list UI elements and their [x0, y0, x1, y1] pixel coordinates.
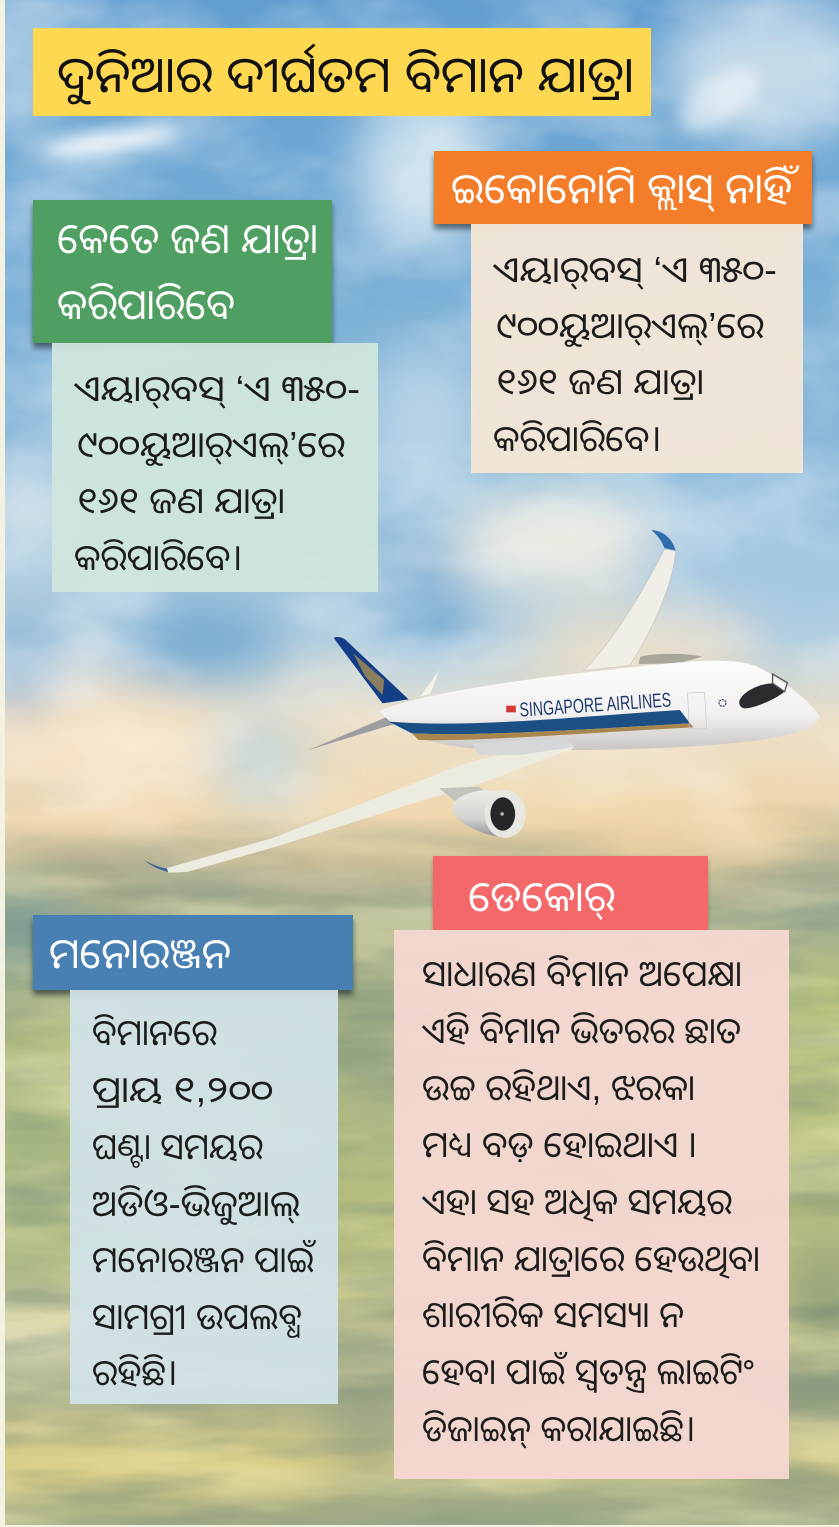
text block: decor details: ଶାରୀରିକ ସମସ୍ୟା ନ: [422, 1294, 684, 1335]
text block: entertainment details: ମନୋରଞ୍ଜନ ପାଇଁ: [92, 1239, 317, 1280]
heading: no economy class: ଇକୋନୋମି କ୍ଲାସ୍ ନାହିଁ: [451, 165, 800, 212]
tailplane: [309, 717, 395, 750]
title banner: ଦୁନିଆର ଦୀର୍ଘତମ ବିମାନ ଯାତ୍ରା: [57, 43, 634, 105]
panel: no economy class: [434, 151, 812, 473]
text block: decor details: ଏହା ସହ ଅଧିକ ସମୟର: [421, 1181, 732, 1222]
livery stripes: [389, 710, 690, 734]
text block: economy details: ୧୬୧ ଜଣ ଯାତ୍ରା: [496, 361, 704, 402]
far wing: [584, 549, 676, 671]
text block: decor details: ଏହି ବିମାନ ଭିତରର ଛାତ: [421, 1010, 741, 1051]
text block: entertainment details: ଅଡିଓ-ଭିଜୁଆଲ୍: [92, 1183, 300, 1225]
alliance star: [719, 700, 726, 706]
heading: entertainment: ମନୋରଞ୍ଜନ: [49, 930, 231, 977]
text block: decor details: ମଧ୍ୟ ବଡ଼ ହୋଇଥାଏ ।: [422, 1124, 697, 1165]
text block: decor details: ହେବା ପାଇଁ ସ୍ୱତନ୍ତ୍ର ଲାଇଟିଂ: [422, 1351, 754, 1393]
near wing: [167, 745, 575, 873]
pale left edge: [0, 0, 5, 1527]
text block: economy details: ୯୦୦ୟୁଆର୍‌ଏଲ୍’ରେ: [496, 305, 764, 347]
panel: seat capacity: [33, 200, 378, 592]
title banner: [33, 28, 651, 116]
text block: entertainment details: ବିମାନରେ: [92, 1012, 217, 1053]
text block: economy details: [471, 224, 803, 473]
text block: decor details: ସାଧାରଣ ବିମାନ ଅପେକ୍ଷା: [422, 953, 742, 994]
text block: decor details: ଉଚ୍ଚ ରହିଥାଏ, ଝରକା: [422, 1067, 695, 1108]
far engine: [639, 654, 702, 664]
heading: decor: [433, 856, 708, 930]
text block: entertainment details: ଘଣ୍ଟା ସମୟର: [92, 1126, 263, 1168]
fuselage: [379, 661, 820, 750]
text block: entertainment details: ପ୍ରାୟ ୧,୨୦୦: [92, 1069, 273, 1110]
text block: passenger count: ୧୬୧ ଜଣ ଯାତ୍ରା: [77, 480, 285, 521]
text block: passenger count: [52, 343, 378, 592]
panel: entertainment: [33, 915, 353, 1404]
heading: how many passengers: କେତେ ଜଣ ଯାତ୍ରା: [57, 215, 318, 262]
text block: decor details: ବିମାନ ଯାତ୍ରାରେ ହେଉଥିବା: [422, 1238, 760, 1279]
heading: entertainment: [33, 915, 353, 990]
text block: entertainment details: ରହିଛି।: [92, 1352, 177, 1393]
panel: decor: [394, 856, 789, 1479]
heading: how many passengers: [33, 200, 332, 343]
airline name: SINGAPORE AIRLINES: [519, 690, 672, 722]
engine: [439, 787, 492, 807]
text block: decor details: ଡିଜାଇନ୍ କରାଯାଇଛି।: [422, 1408, 695, 1449]
heading: how many passengers: କରିପାରିବେ: [57, 281, 235, 328]
tail fin: [334, 637, 409, 703]
text block: entertainment details: [70, 990, 338, 1404]
text block: decor details: [394, 930, 789, 1479]
text block: passenger count: ୯୦୦ୟୁଆର୍‌ଏଲ୍’ରେ: [77, 424, 345, 466]
airplane: [144, 530, 820, 873]
text block: economy details: କରିପାରିବେ।: [493, 418, 661, 459]
text block: passenger count: ଏୟାର୍‌ବସ୍ ‘ଏ ୩୫୦-: [73, 368, 360, 409]
text block: passenger count: କରିପାରିବେ।: [74, 537, 242, 578]
heading: no economy class: [434, 151, 812, 224]
text block: entertainment details: ସାମଗ୍ରୀ ଉପଲବ୍ଧ: [92, 1296, 302, 1338]
cockpit window: [739, 683, 785, 708]
heading: decor: ଡେକୋର୍: [468, 873, 615, 920]
door: [687, 692, 707, 729]
text block: economy details: ଏୟାର୍‌ବସ୍ ‘ଏ ୩୫୦-: [492, 249, 777, 290]
